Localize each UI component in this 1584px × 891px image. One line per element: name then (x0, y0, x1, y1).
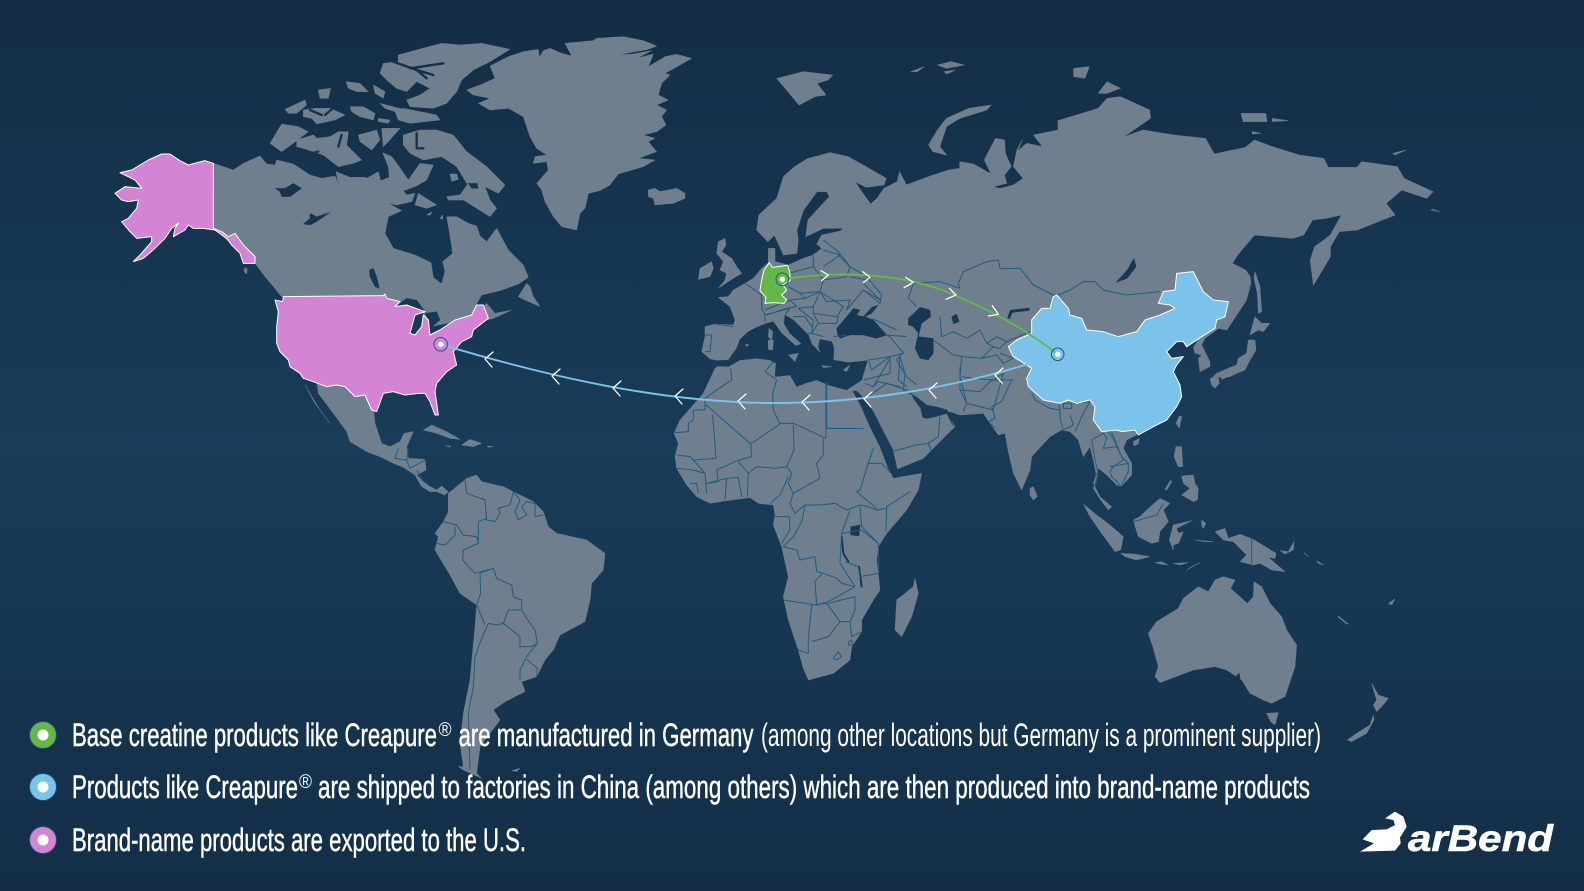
arrow: China to United States (441, 344, 1058, 410)
logo: BarBend: arBend (1408, 818, 1555, 859)
legend icon: blue (30, 774, 56, 800)
world map landmass (214, 36, 1440, 778)
logo: BarBend (1360, 812, 1555, 859)
borders: Africa (675, 357, 940, 660)
borders: islands (1133, 503, 1252, 563)
borders: Latin America (395, 448, 543, 770)
borders: South and Southeast Asia (960, 367, 1128, 487)
marker: United States (434, 338, 448, 351)
legend text: Germany: are manufactured in Germany (458, 717, 754, 753)
country: Alaska and contiguous United States (115, 154, 488, 415)
marker: Germany (776, 273, 789, 286)
legend text: Germany (72, 717, 1321, 753)
legend icon: green (30, 722, 56, 748)
marker: China (1051, 348, 1064, 361)
legend (30, 717, 1321, 858)
borders: Europe and Middle East (705, 240, 917, 385)
legend text: Germany: Base creatine products like Creapure (72, 717, 437, 753)
legend text: Germany: ® (438, 720, 452, 741)
borders: Central Asia and Mongolia (827, 260, 1160, 428)
country: Germany (760, 263, 790, 303)
country: China (1008, 272, 1228, 435)
legend text: United States: Brand-name products are exported to the U.S. (72, 822, 526, 858)
country borders (395, 240, 1252, 770)
legend text: China: Products like Creapure (72, 769, 298, 805)
legend text: China: ® (299, 772, 312, 793)
legend text: China (72, 769, 1310, 805)
arrow: Germany to China (782, 271, 1058, 354)
legend icon: pink (30, 826, 56, 854)
